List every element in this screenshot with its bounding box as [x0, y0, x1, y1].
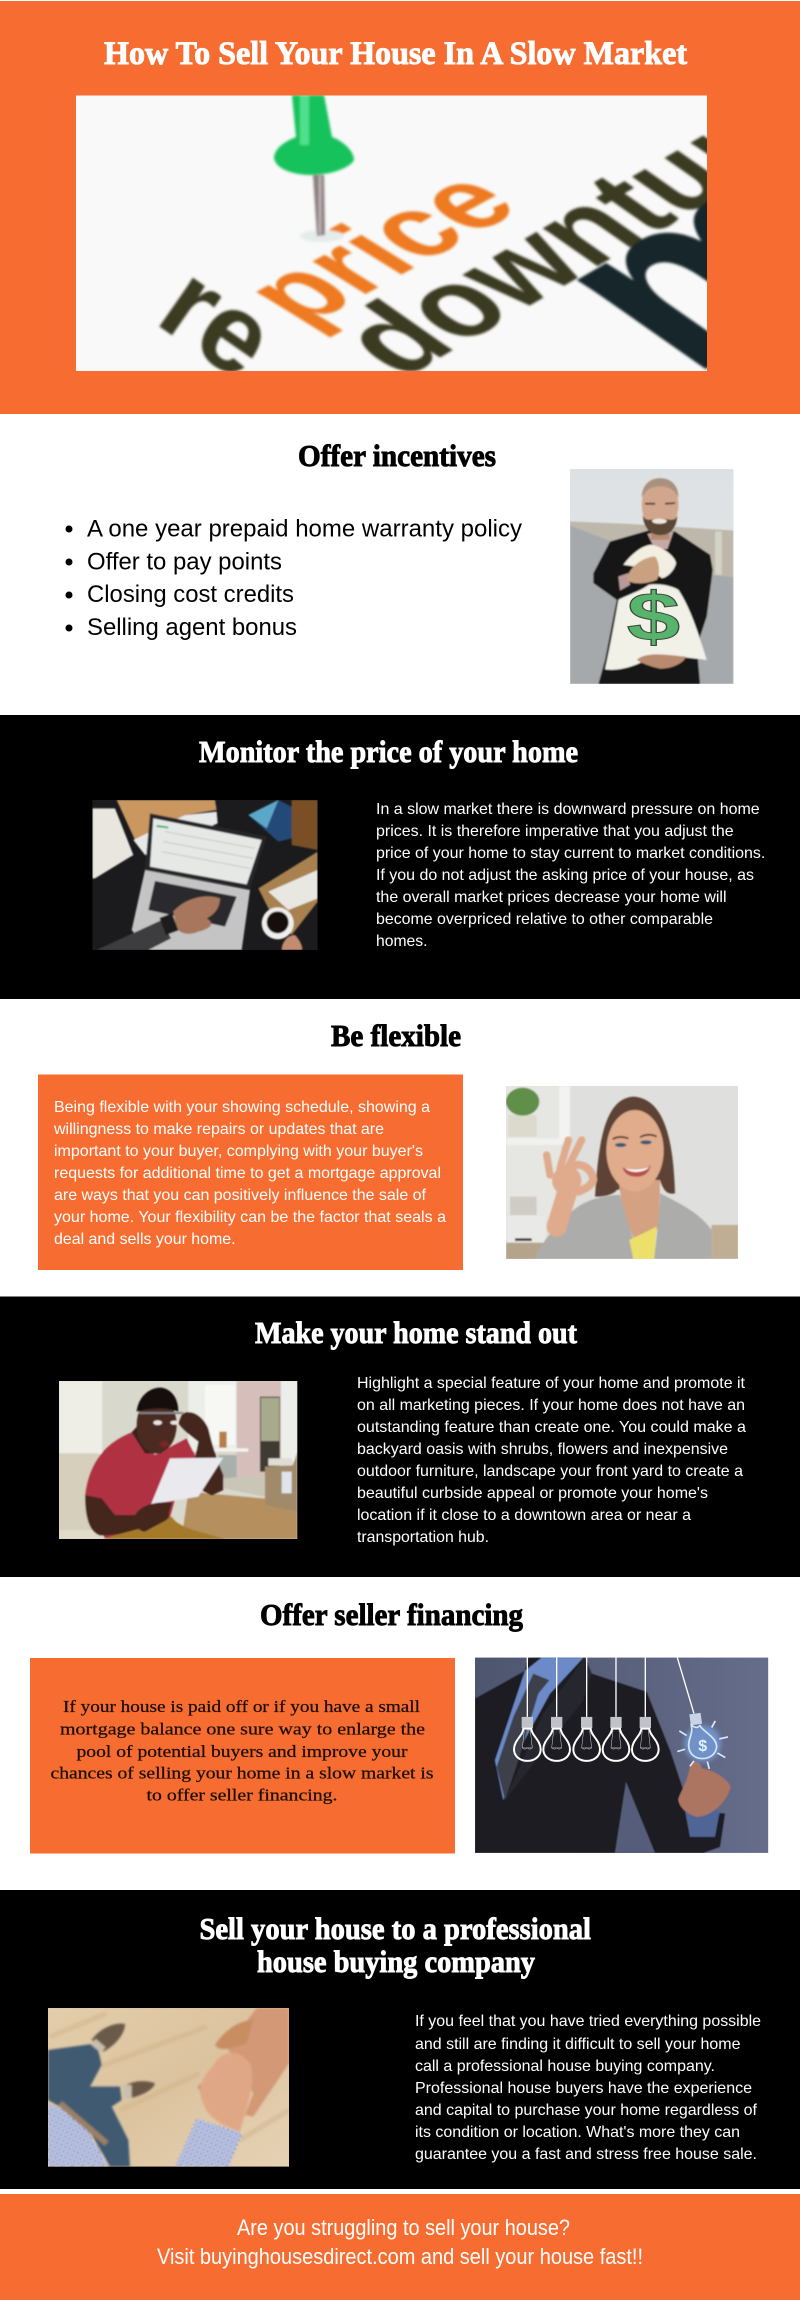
- heading: Sell your house to a professional house buying company: house buying company: [257, 1944, 535, 1979]
- orange callout: seller financing: [30, 1658, 455, 1854]
- panel: make your home stand out: [0, 1296, 800, 1577]
- bullet list: incentives: Closing cost credits: [87, 581, 294, 608]
- photo: price downturn pushpin: [76, 96, 800, 414]
- text block: professional buyer: guarantee you a fast and stress free house sale.: [415, 2146, 757, 2163]
- photo: man holding money bag: [570, 469, 734, 684]
- orange callout: seller financing: pool of potential buyers and improve your: [76, 1742, 408, 1761]
- text block: stand out: location if it close to a downtown area or near a: [357, 1507, 691, 1524]
- bullet list: incentives: Selling agent bonus: [87, 614, 297, 641]
- photo: smiling woman with OK gesture: [506, 1086, 738, 1259]
- photo: price downturn pushpin: downtur: [308, 98, 798, 396]
- text block: professional buyer: If you feel that you have tried everything possible: [415, 2013, 761, 2030]
- panel: professional house buying company: [0, 1890, 800, 2189]
- text block: monitor the price: If you do not adjust the asking price of your house, as: [376, 867, 754, 884]
- photo: laptop on desk: [92, 800, 318, 950]
- heading: Sell your house to a professional house buying company: Sell your house to a professional: [200, 1911, 591, 1946]
- text block: monitor the price: homes.: [376, 933, 428, 950]
- icon: row of light bulbs: [514, 1658, 694, 1761]
- title: How To Sell Your House In A Slow Market: [104, 36, 687, 72]
- text block: monitor the price: price of your home to stay current to market conditions.: [376, 845, 765, 862]
- text block: professional buyer: and still are finding it difficult to sell your home: [415, 2036, 741, 2053]
- orange callout: be flexible: deal and sells your home.: [54, 1231, 236, 1248]
- section heading: Offer seller financing: Offer seller financing: [260, 1597, 523, 1632]
- orange callout: be flexible: important to your buyer, complying with your buyer's: [54, 1143, 423, 1160]
- header panel: [0, 1, 800, 414]
- text block: stand out: beautiful curbside appeal or promote your home's: [357, 1485, 708, 1502]
- text block: professional buyer: and capital to purchase your home regardless of: [415, 2102, 758, 2119]
- photo: price downturn pushpin: price: [212, 152, 544, 341]
- icon: glowing dollar bulb: [677, 1713, 728, 1769]
- heading: Sell your house to a professional house buying company: [200, 1911, 591, 1979]
- text block: stand out: Highlight a special feature of your home and promote it: [357, 1375, 746, 1392]
- orange callout: be flexible: your home. Your flexibility can be the factor that seals a: [54, 1209, 446, 1226]
- heading: Monitor the price: Monitor the price of your home: [199, 734, 578, 769]
- orange callout: seller financing: to offer seller financing.: [146, 1786, 338, 1804]
- icon: glowing dollar bulb: $: [698, 1738, 707, 1755]
- text block: stand out: outstanding feature than create one. You could make a: [357, 1419, 746, 1436]
- footer call to action: Visit buyinghousesdirect.com and sell your house fast!!: [157, 2244, 643, 2269]
- photo: price downturn pushpin: re: [139, 239, 297, 402]
- text block: monitor the price: prices. It is therefore imperative that you adjust the: [376, 823, 734, 840]
- orange callout: seller financing: chances of selling your home in a slow market is: [50, 1764, 434, 1782]
- orange callout: be flexible: Being flexible with your showing schedule, showing a: [54, 1099, 430, 1116]
- orange callout: seller financing: mortgage balance one sure way to enlarge the: [60, 1720, 425, 1738]
- orange callout: seller financing: If your house is paid off or if you have a small: [63, 1697, 420, 1716]
- heading: Make your home stand out: Make your home stand out: [255, 1315, 578, 1350]
- text block: stand out: on all marketing pieces. If your home does not have an: [357, 1397, 745, 1414]
- text block: professional buyer: [415, 2013, 761, 2163]
- orange callout: be flexible: [38, 1074, 463, 1270]
- text block: stand out: backyard oasis with shrubs, flowers and inexpensive: [357, 1441, 728, 1458]
- photo: surprised man reading paper: [59, 1381, 298, 1539]
- section heading: Offer incentives: Offer incentives: [298, 438, 496, 473]
- footer call to action: Are you struggling to sell your house?: [237, 2215, 570, 2240]
- text block: monitor the price: [376, 801, 765, 950]
- orange callout: be flexible: requests for additional time to get a mortgage approval: [54, 1165, 441, 1182]
- text block: professional buyer: Professional house buyers have the experience: [415, 2080, 752, 2097]
- text block: monitor the price: the overall market prices decrease your home will: [376, 889, 726, 906]
- icon: dollar sign on bag: $: [627, 580, 680, 656]
- bullet list: incentives: A one year prepaid home warranty policy: [87, 516, 522, 542]
- text block: monitor the price: In a slow market there is downward pressure on home: [376, 801, 760, 818]
- orange callout: be flexible: willingness to make repairs or updates that are: [53, 1121, 384, 1138]
- photo: businessman with light bulbs: [475, 1658, 768, 1853]
- text block: stand out: outdoor furniture, landscape your front yard to create a: [357, 1463, 743, 1480]
- text block: monitor the price: become overpriced relative to other comparable: [376, 911, 713, 928]
- section heading: Be flexible: Be flexible: [331, 1018, 461, 1053]
- text block: stand out: [357, 1375, 746, 1546]
- panel: monitor the price: [0, 715, 800, 999]
- text block: stand out: transportation hub.: [357, 1529, 489, 1546]
- text block: professional buyer: call a professional house buying company.: [415, 2058, 715, 2075]
- footer call to action: [0, 2194, 800, 2300]
- orange callout: be flexible: are ways that you can positively influence the sale of: [54, 1187, 427, 1204]
- bullet list: incentives: [66, 516, 522, 641]
- photo: handshake: [48, 2008, 289, 2167]
- bullet list: incentives: Offer to pay points: [87, 548, 282, 576]
- text block: professional buyer: its condition or location. What's more they can: [415, 2124, 740, 2141]
